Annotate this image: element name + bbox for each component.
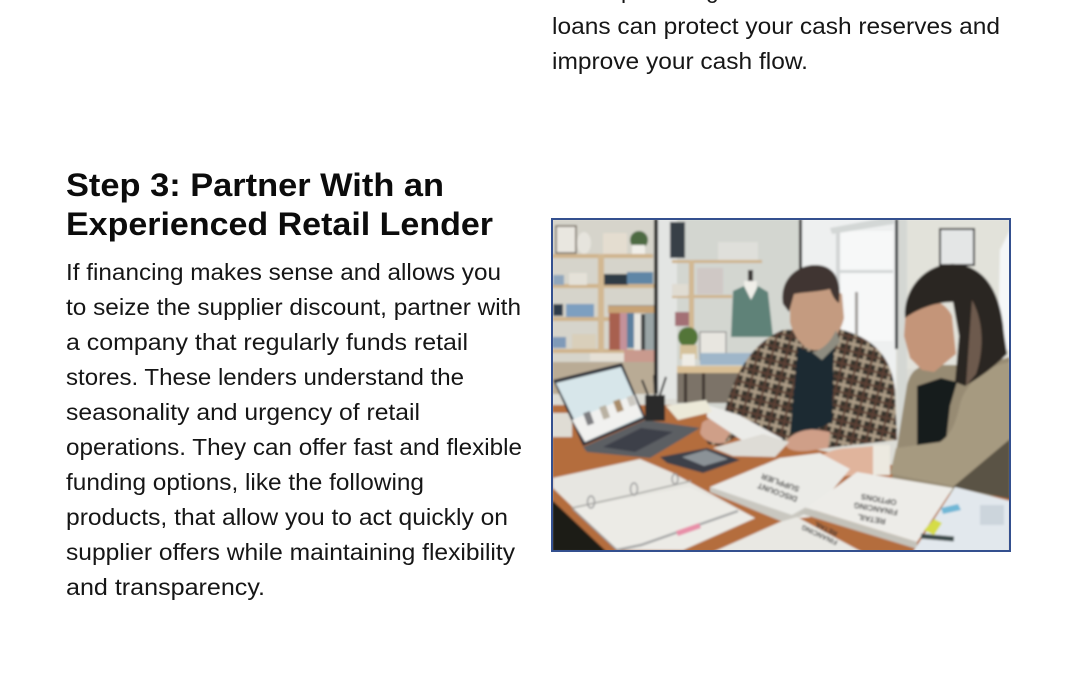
photo border bbox=[552, 219, 1010, 551]
right binder: supplier discount and retail financing options: FINANCING bbox=[853, 500, 898, 517]
store back wall and shelves bbox=[553, 220, 916, 466]
text block: end of step 2 paragraph: loans can protect your cash reserves and bbox=[552, 13, 1000, 39]
text block: step 3 paragraph: seasonality and urgency of retail bbox=[66, 399, 420, 425]
heading: step 3: Experienced Retail Lender bbox=[66, 206, 493, 242]
right binder: supplier discount and retail financing options: SUPPLIER bbox=[760, 471, 801, 494]
potted plant bbox=[678, 327, 698, 370]
text block: step 3 paragraph: funding options, like the following bbox=[66, 469, 424, 495]
wooden table bbox=[552, 405, 1012, 552]
hanging clothes bbox=[608, 305, 655, 352]
text block: step 3 paragraph: products, that allow you to act quickly on bbox=[66, 504, 508, 530]
text block: step 3 paragraph bbox=[66, 259, 522, 600]
dark frame and pillar bbox=[654, 219, 658, 394]
right binder: supplier discount and retail financing options: OPTIONS bbox=[860, 492, 897, 507]
right binder: supplier discount and retail financing options bbox=[710, 453, 953, 549]
text block: step 3 paragraph: and transparency. bbox=[66, 574, 265, 600]
text block: step 3 paragraph: operations. They can offer fast and flexible bbox=[66, 434, 522, 460]
papers on the right edge bbox=[913, 487, 1010, 552]
text block: step 3 paragraph: a company that regularly funds retail bbox=[66, 329, 468, 355]
text block: step 3 paragraph: supplier offers while maintaining flexibility bbox=[66, 539, 516, 565]
right wall and picture frame bbox=[938, 227, 1009, 352]
notebook bbox=[666, 400, 712, 420]
heading: step 3: Step 3: Partner With an bbox=[66, 167, 444, 203]
woman's hand and cuff bbox=[823, 445, 892, 478]
man's hands bbox=[700, 419, 830, 451]
loose page at the bottom bbox=[713, 517, 862, 552]
text block: end of step 2 paragraph: improve your cash flow. bbox=[552, 48, 808, 74]
loose page at the bottom: RETAIL bbox=[813, 519, 839, 537]
laptop bbox=[553, 363, 700, 458]
text block: step 3 paragraph: to seize the supplier discount, partner with bbox=[66, 294, 521, 320]
window bbox=[799, 216, 898, 389]
text block: step 3 paragraph: stores. These lenders understand the bbox=[66, 364, 464, 390]
mannequin with sweater bbox=[731, 270, 773, 337]
right binder: supplier discount and retail financing options: DISCOUNT bbox=[756, 481, 799, 504]
pink sticky tab bbox=[676, 523, 701, 536]
pen cup bbox=[642, 375, 666, 421]
woman in blazer bbox=[890, 264, 1020, 499]
paper held by man bbox=[707, 405, 783, 443]
right binder: supplier discount and retail financing options: RETAIL bbox=[857, 512, 886, 526]
heading: step 3 bbox=[66, 167, 493, 242]
text block: end of step 2 paragraph bbox=[552, 0, 1000, 74]
text block: step 3 paragraph: If financing makes sense and allows you bbox=[66, 259, 501, 285]
man in plaid shirt bbox=[702, 265, 897, 448]
photo: lender and retailer reviewing financing binders in a store bbox=[552, 216, 1020, 552]
calculator bbox=[660, 448, 740, 473]
left binder bbox=[553, 459, 755, 550]
loose page at the bottom: FINANCING bbox=[800, 523, 839, 546]
